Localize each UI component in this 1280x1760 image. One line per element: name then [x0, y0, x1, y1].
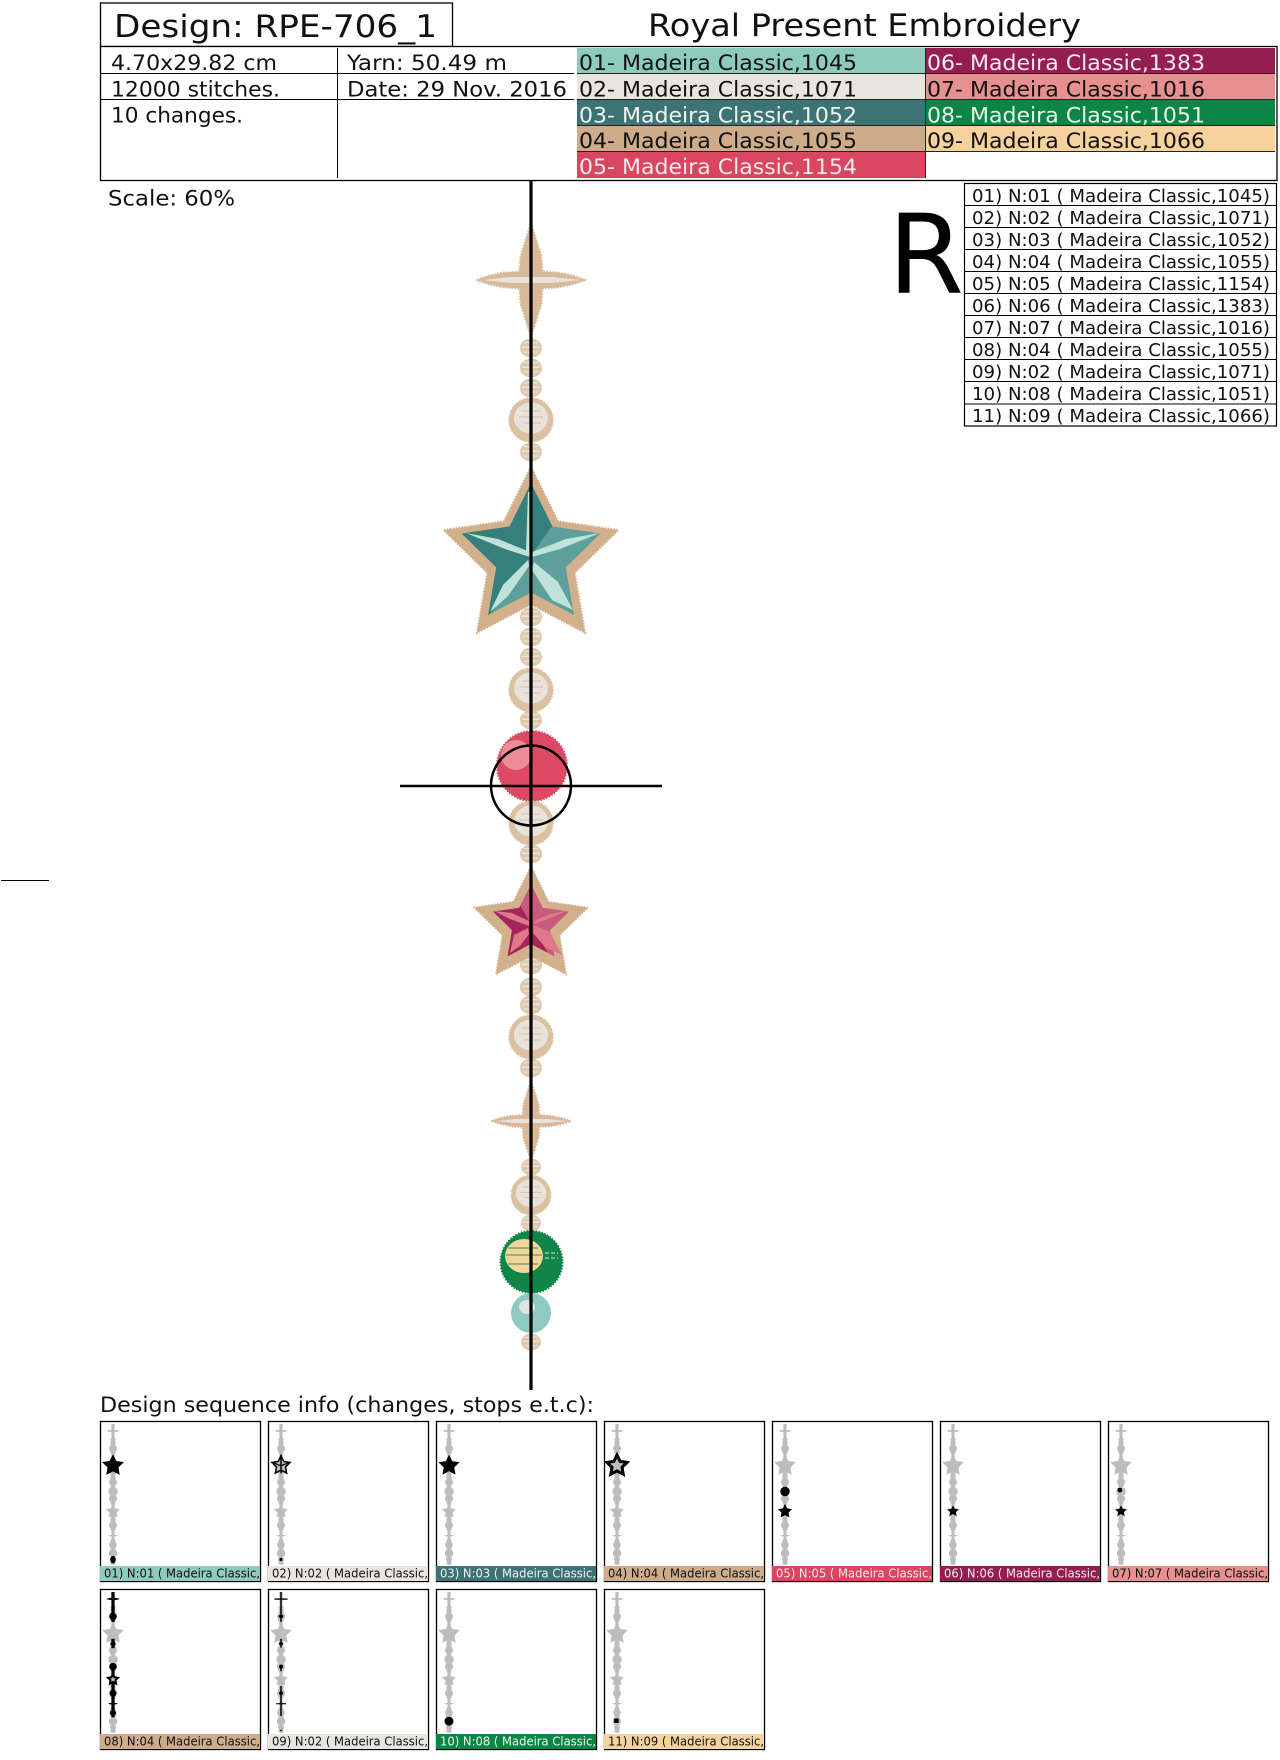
legend: thread colours: 06- Madeira Classic,1383	[927, 51, 1205, 75]
legend: thread colours: 03- Madeira Classic,1052	[579, 104, 857, 128]
thumbnail step 08	[100, 1590, 260, 1750]
header: design name box: Design: RPE-706_1	[114, 9, 437, 45]
beads above green ball	[511, 1158, 551, 1232]
header: design name box	[100, 3, 452, 46]
red ball ornament	[497, 731, 567, 801]
thumbnail step 11: 11) N:09 ( Madeira Classic,	[608, 1734, 764, 1748]
embroidery design: ornament chain	[444, 223, 618, 1351]
panel: stitch sequence list: 10) N:08 ( Madeira Classic,1051)	[972, 385, 1270, 405]
panel: stitch sequence list: 08) N:04 ( Madeira Classic,1055)	[972, 341, 1270, 361]
panel: design statistics table: Date: 29 Nov. 2016	[347, 78, 567, 102]
legend: thread colours	[577, 48, 1275, 179]
bottom bead	[521, 1333, 541, 1351]
thumbnail step 07	[1108, 1422, 1268, 1582]
thumbnail step 09: 09) N:02 ( Madeira Classic,	[272, 1734, 428, 1748]
thumbnail step 02: 02) N:02 ( Madeira Classic,	[272, 1566, 428, 1580]
panel: stitch sequence list: 06) N:06 ( Madeira Classic,1383)	[972, 297, 1270, 317]
legend: thread colours: 01- Madeira Classic,1045	[579, 51, 857, 75]
legend: thread colours: 08- Madeira Classic,1051	[927, 104, 1205, 128]
legend: thread colours: 05- Madeira Classic,1154	[579, 155, 857, 179]
heading: design sequence: Design sequence info (changes, stops e.t.c):	[100, 1393, 594, 1418]
thumbnail step 09	[268, 1590, 428, 1750]
legend: thread colours: 09- Madeira Classic,1066	[927, 129, 1205, 153]
thumbnail step 10: 10) N:08 ( Madeira Classic,	[440, 1734, 596, 1748]
top four-point star	[476, 223, 586, 337]
thumbnail step 05: 05) N:05 ( Madeira Classic,	[776, 1566, 932, 1580]
panel: stitch sequence list: 05) N:05 ( Madeira Classic,1154)	[972, 275, 1270, 295]
thumbnail step 08: 08) N:04 ( Madeira Classic,	[104, 1734, 260, 1748]
panel: stitch sequence list: 04) N:04 ( Madeira Classic,1055)	[972, 253, 1270, 273]
teal ball ornament	[511, 1293, 551, 1333]
thumbnail step 06: 06) N:06 ( Madeira Classic,	[944, 1566, 1100, 1580]
panel: stitch sequence list: 09) N:02 ( Madeira Classic,1071)	[972, 363, 1270, 383]
thumbnail step 10	[436, 1590, 596, 1750]
panel: stitch sequence list: 07) N:07 ( Madeira Classic,1016)	[972, 319, 1270, 339]
thumbnail step 05	[772, 1422, 932, 1582]
thumbnail step 07: 07) N:07 ( Madeira Classic,	[1112, 1566, 1268, 1580]
thumbnail step 04: 04) N:04 ( Madeira Classic,	[608, 1566, 764, 1580]
thumbnail step 01	[100, 1422, 260, 1582]
thumbnail step 06	[940, 1422, 1100, 1582]
lower beads	[509, 801, 553, 864]
thumbnail step 02	[268, 1422, 428, 1582]
middle beads	[509, 608, 553, 730]
beads hidden under crimson star	[520, 956, 542, 974]
crimson star	[474, 866, 588, 975]
lower four-point star	[491, 1081, 571, 1161]
thumbnail step 01: 01) N:01 ( Madeira Classic,	[104, 1566, 260, 1580]
panel: design statistics table: 10 changes.	[111, 104, 243, 128]
panel: stitch sequence list: 01) N:01 ( Madeira Classic,1045)	[972, 187, 1270, 207]
panel: design statistics table: 4.70x29.82 cm	[111, 51, 277, 75]
legend: thread colours: 02- Madeira Classic,1071	[579, 78, 857, 102]
panel: design statistics table: 12000 stitches.	[111, 78, 280, 102]
panel: stitch sequence list: 02) N:02 ( Madeira Classic,1071)	[972, 209, 1270, 229]
panel: stitch sequence list: 11) N:09 ( Madeira Classic,1066)	[972, 407, 1270, 427]
panel: stitch sequence list: 03) N:03 ( Madeira Classic,1052)	[972, 231, 1270, 251]
large teal star	[444, 466, 618, 633]
thumbnail step 04	[604, 1422, 764, 1582]
green ball ornament	[500, 1231, 562, 1293]
centre crosshair	[400, 180, 662, 1390]
panel: design statistics table	[100, 46, 1277, 180]
left registration mark	[1, 880, 49, 882]
beads below crimson star	[509, 978, 553, 1078]
panel: stitch sequence list	[964, 184, 1277, 427]
upper beads	[509, 338, 553, 462]
thumbnail step 03	[436, 1422, 596, 1582]
panel: design statistics table: Yarn: 50.49 m	[346, 51, 507, 75]
scale label: Scale: 60%	[108, 186, 235, 210]
legend: thread colours: 04- Madeira Classic,1055	[579, 129, 857, 153]
thumbnail step 11	[604, 1590, 764, 1750]
orientation letter R: R	[888, 191, 964, 319]
thumbnail step 03: 03) N:03 ( Madeira Classic,	[440, 1566, 596, 1580]
title: company name: Royal Present Embroidery	[648, 8, 1081, 44]
legend: thread colours: 07- Madeira Classic,1016	[927, 78, 1205, 102]
